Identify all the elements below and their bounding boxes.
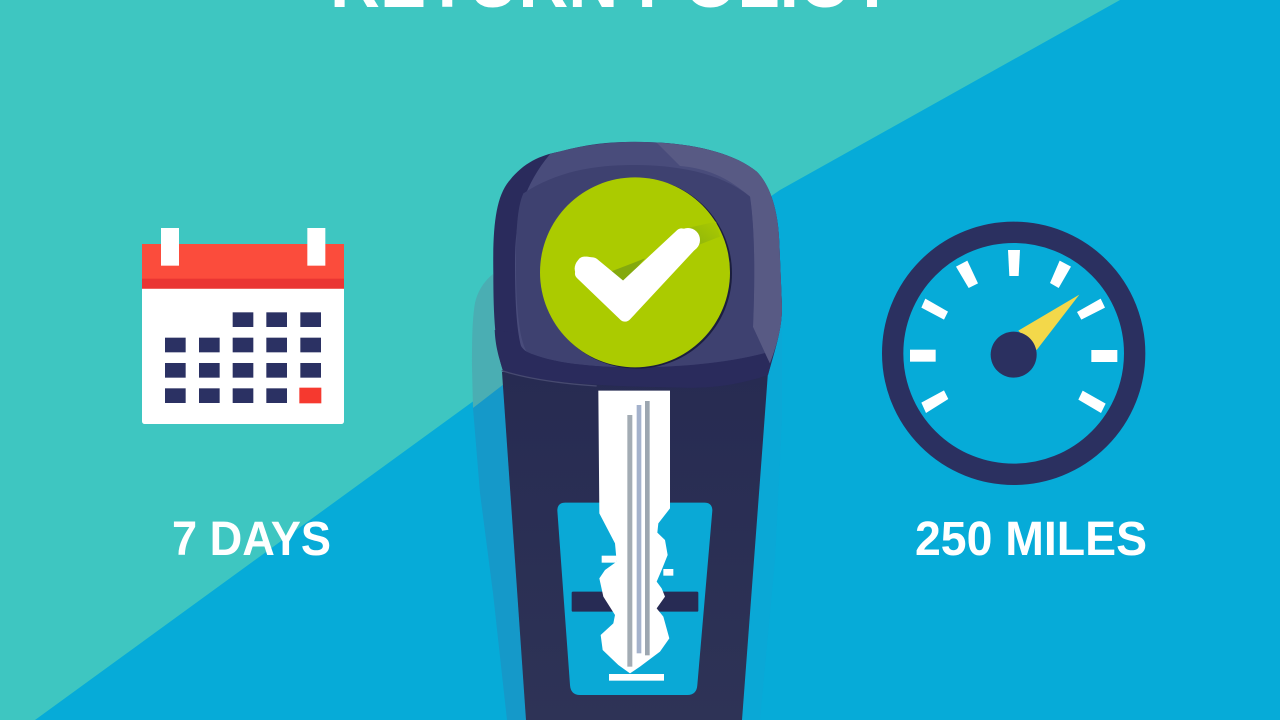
blue window <box>557 503 712 695</box>
calendar binding rings <box>161 228 325 266</box>
dial hub <box>991 332 1037 378</box>
head inner panel <box>516 165 765 367</box>
key shadow on teal <box>472 274 510 408</box>
dark slot <box>572 592 698 612</box>
highlighted day <box>299 388 321 403</box>
blade notches <box>602 556 673 681</box>
key shadow on blue <box>473 384 530 720</box>
label: 250 miles: 250 MILES <box>915 513 1147 566</box>
check badge shadow <box>541 178 732 369</box>
check mark shadow <box>690 222 720 245</box>
calendar header <box>142 244 344 289</box>
head lightest corner <box>657 143 782 365</box>
icon: speedometer <box>893 232 1135 474</box>
dial needle <box>1018 295 1079 350</box>
head seam line <box>502 371 597 386</box>
dial ring <box>893 232 1135 474</box>
label: 7 days: 7 DAYS <box>172 513 331 566</box>
dial ticks <box>910 250 1117 413</box>
key body <box>502 372 768 720</box>
calendar day grid <box>165 312 321 403</box>
key head <box>493 142 782 388</box>
icon: calendar <box>142 228 344 424</box>
blade <box>598 391 670 673</box>
head light rim <box>515 142 782 370</box>
icon: car key fob with check mark <box>472 142 782 720</box>
head bottom band <box>495 330 771 388</box>
blade grooves <box>627 401 650 667</box>
head outer shell <box>493 142 782 388</box>
check badge <box>540 177 730 367</box>
key blade assembly <box>557 391 712 695</box>
check mark <box>575 228 700 315</box>
calendar page <box>142 287 344 424</box>
key shadow right <box>735 320 782 720</box>
